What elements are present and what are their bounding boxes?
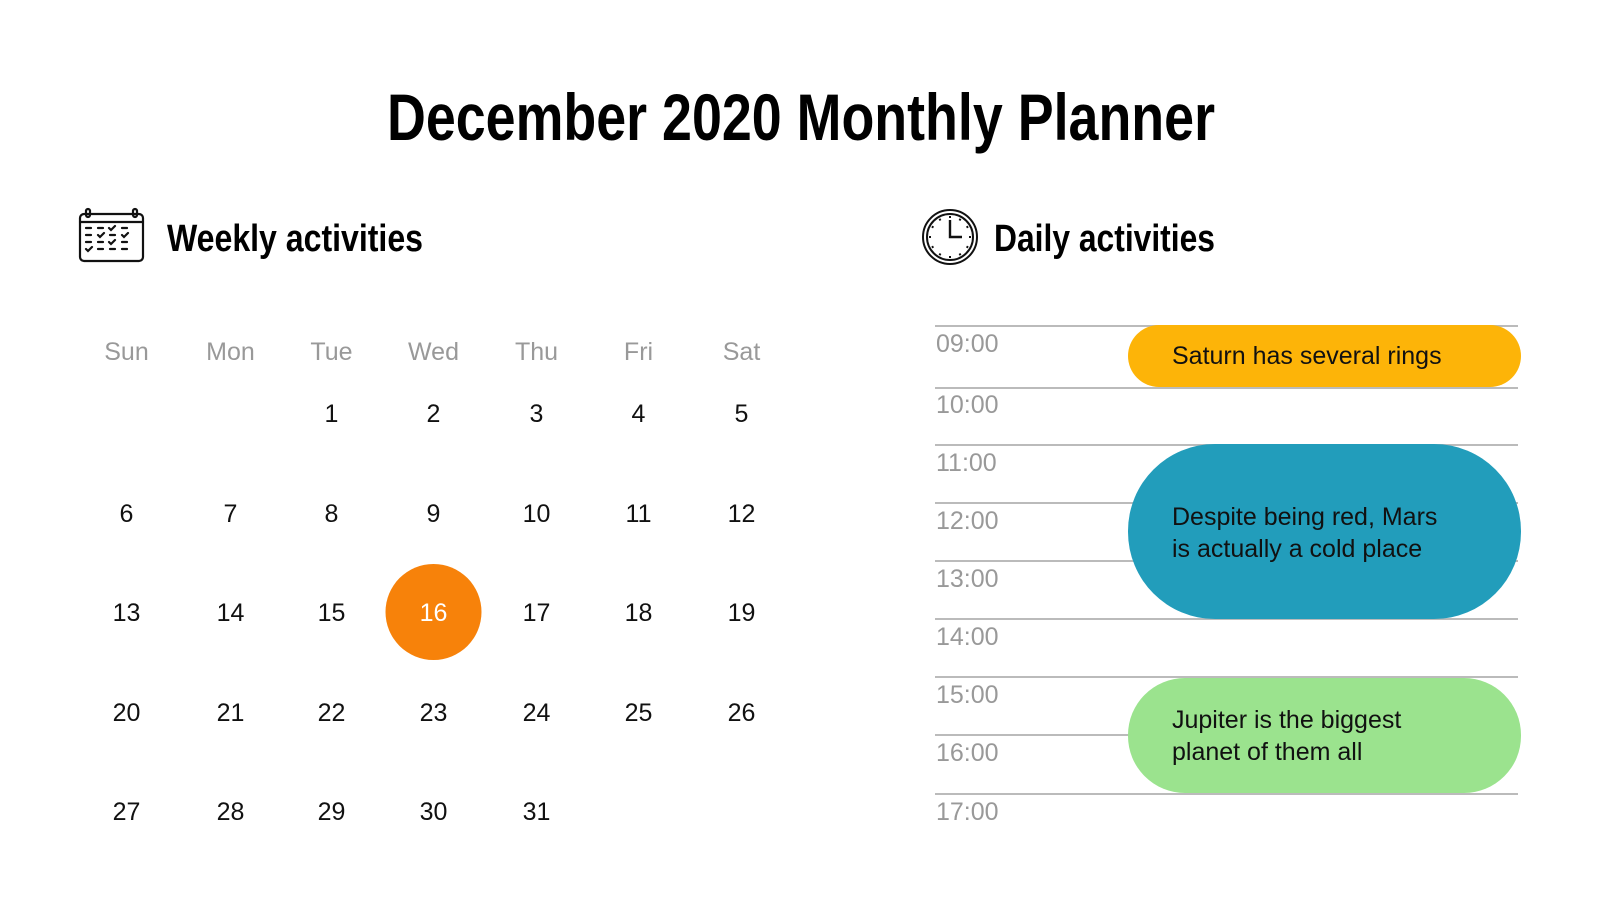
weekday headers: Mon [206,338,255,366]
time labels: 13:00 [936,565,999,593]
dates: 20 [113,699,140,727]
dates: 29 [318,798,345,826]
dates: 8 [325,500,338,528]
heading: weekly activities: Weekly activities [167,218,423,260]
event: jupiter: Jupiter is the biggest [1172,706,1401,734]
dates: 13 [113,599,140,627]
time labels: 11:00 [936,449,997,477]
dates: 28 [217,798,244,826]
dates: 30 [420,798,447,826]
time labels: 14:00 [936,623,999,651]
weekday headers: Tue [310,338,353,366]
calendar grid [104,338,760,826]
weekday headers: Fri [624,338,653,366]
time labels: 16:00 [936,739,999,767]
weekday headers: Sat [723,338,760,366]
highlight: day 16 [386,564,482,660]
dates: 31 [523,798,550,826]
title: December 2020 Monthly Planner [387,80,1215,154]
dates: 21 [217,699,244,727]
dates [113,400,755,826]
dates: 15 [318,599,345,627]
dates: 2 [427,400,440,428]
event: mars: is actually a cold place [1172,535,1422,563]
weekday headers: Wed [408,338,459,366]
dates: 11 [626,500,651,528]
dates: 23 [420,699,447,727]
dates: 17 [523,599,550,627]
event: saturn [1128,325,1521,387]
dates: 1 [325,400,338,428]
dates: 7 [224,500,237,528]
time labels: 17:00 [936,798,999,826]
dates: 25 [625,699,652,727]
weekday headers: Sun [104,338,149,366]
event: jupiter: planet of them all [1172,738,1362,766]
event: saturn: Saturn has several rings [1172,342,1442,370]
heading: daily activities: Daily activities [994,218,1215,260]
dates: 5 [735,400,748,428]
dates: 16 [420,599,447,627]
weekday headers: Thu [515,338,558,366]
weekday headers [104,338,760,366]
time labels: 10:00 [936,391,999,419]
event: mars [1128,444,1521,619]
dates: 6 [120,500,133,528]
dates: 19 [728,599,755,627]
icon: calendar [80,209,143,261]
dates: 10 [523,500,550,528]
time labels: 09:00 [936,330,999,358]
time labels: 15:00 [936,681,999,709]
dates: 24 [523,699,550,727]
icon: clock [923,210,977,264]
event: jupiter [1128,678,1521,793]
dates: 27 [113,798,140,826]
dates: 3 [530,400,543,428]
dates: 22 [318,699,345,727]
dates: 14 [217,599,244,627]
dates: 4 [632,400,646,428]
event: mars: Despite being red, Mars [1172,503,1437,531]
time labels [936,330,999,826]
timeline [935,326,1518,826]
dates: 12 [728,500,755,528]
dates: 9 [427,500,440,528]
dates: 18 [625,599,652,627]
dates: 26 [728,699,755,727]
time labels: 12:00 [936,507,999,535]
